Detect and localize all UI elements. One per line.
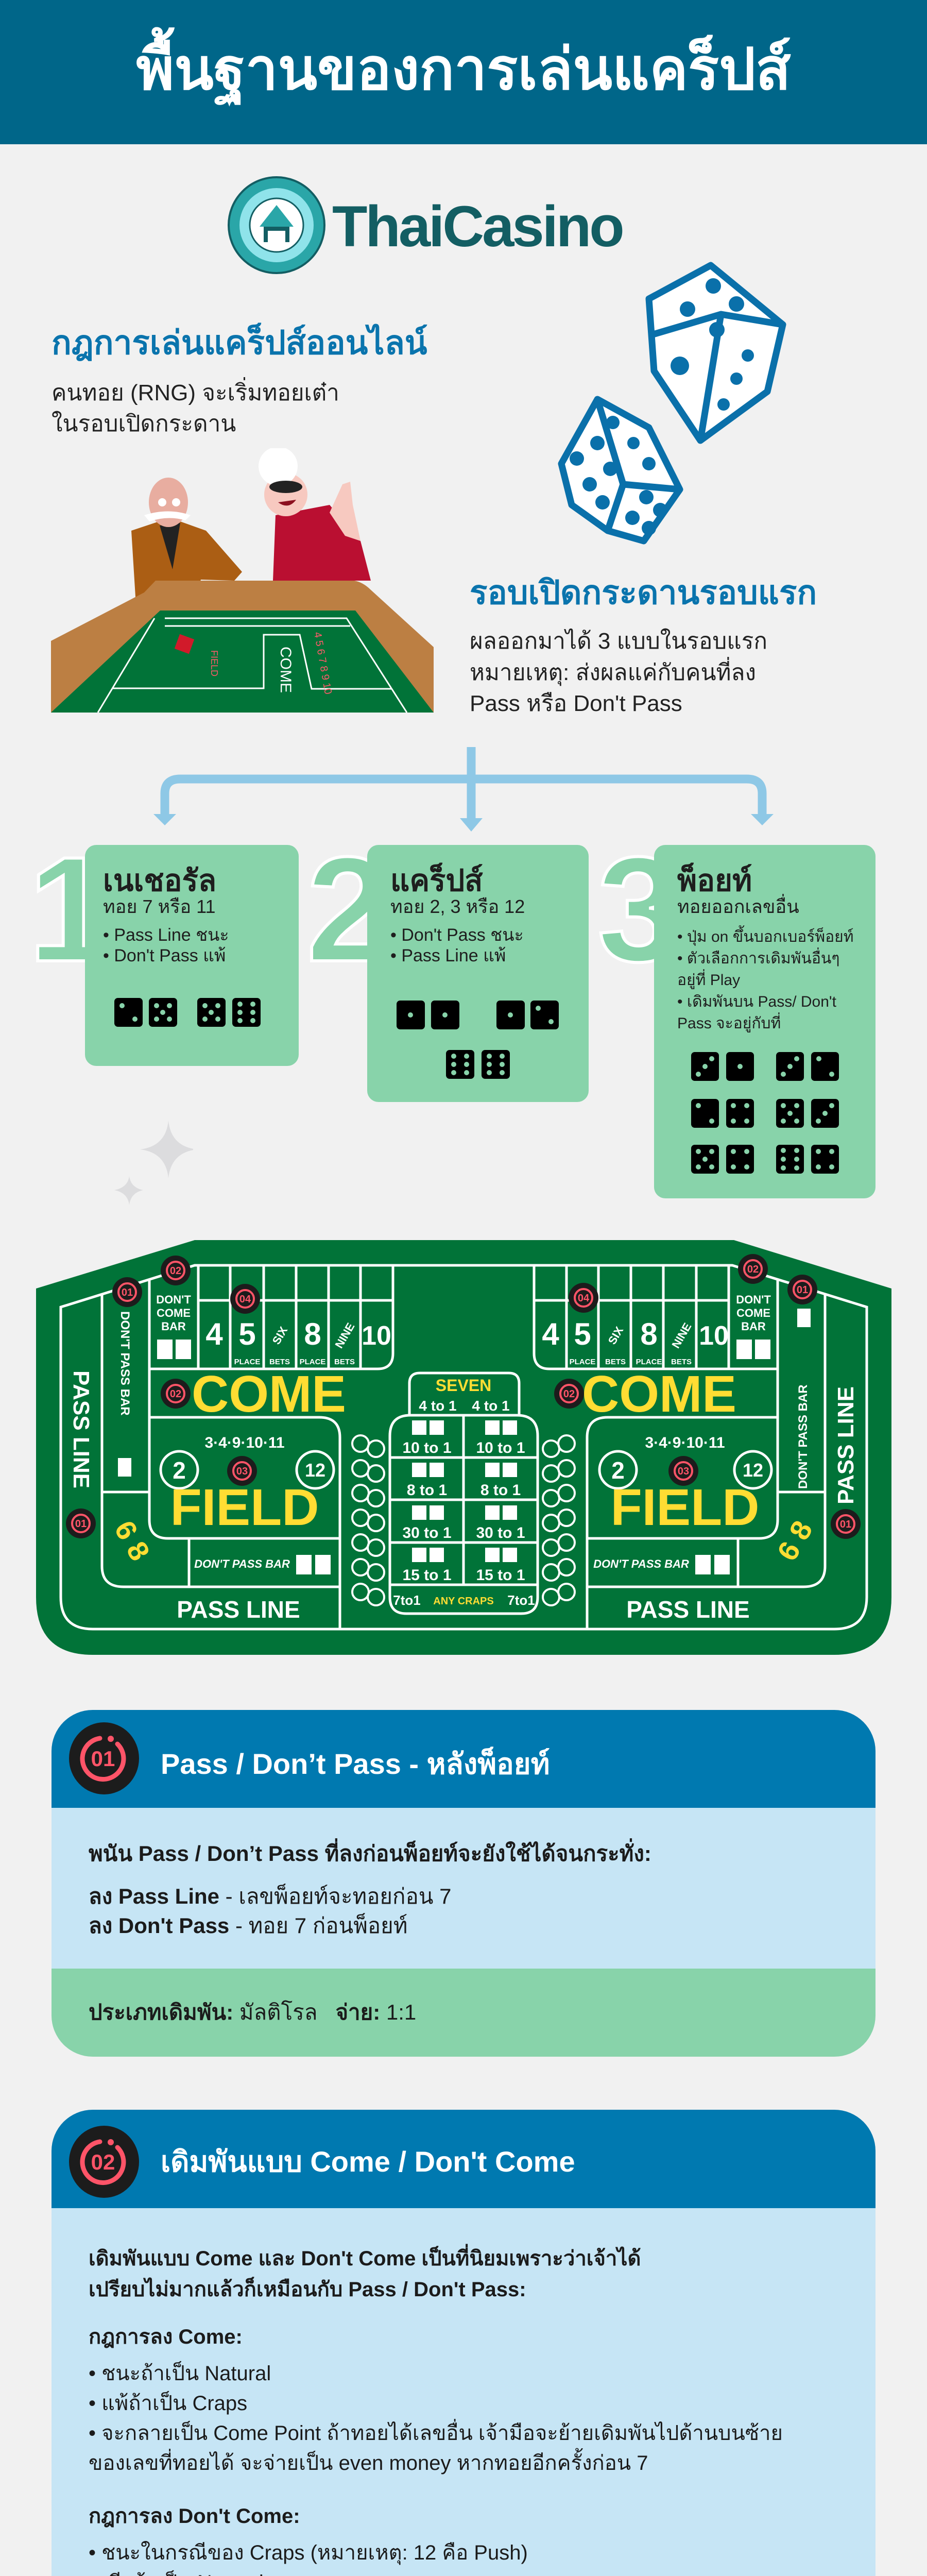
craps table: 10 bbox=[362, 1321, 391, 1351]
craps table: 7to1 bbox=[507, 1592, 535, 1608]
craps table: 6 8 bbox=[108, 1515, 157, 1566]
table badges: 04 bbox=[239, 1294, 251, 1305]
craps table: SIX bbox=[606, 1324, 626, 1347]
logo text: ThaiCasino bbox=[332, 194, 623, 259]
craps table: PASS LINE bbox=[177, 1596, 300, 1623]
craps table: 12 bbox=[743, 1460, 763, 1481]
text block bbox=[52, 1808, 876, 1969]
panel: natural: • Don't Pass แพ้ bbox=[103, 946, 226, 965]
table badges: 02 bbox=[170, 1265, 181, 1277]
text block: • ชนะถ้าเป็น Natural bbox=[89, 2362, 271, 2385]
craps table: PASS LINE bbox=[68, 1370, 94, 1488]
craps table: FIELD bbox=[170, 1479, 319, 1536]
panel: 01 pass / don't pass bbox=[52, 1710, 876, 2057]
panel: point: • ตัวเลือกการเดิมพันอื่นๆ bbox=[677, 950, 840, 967]
text block: กฎการลง Don't Come: bbox=[89, 2505, 300, 2528]
icon: logo chip bbox=[228, 176, 325, 274]
text block: ลง Pass Line - เลขพ็อยท์จะทอยก่อน 7 bbox=[89, 1884, 451, 1908]
table badges: 01 bbox=[840, 1519, 851, 1530]
panel: point bbox=[597, 826, 876, 1198]
heading: แคร็ปส์ bbox=[390, 864, 483, 897]
illustration: players at craps table bbox=[51, 448, 434, 713]
panel: point: • เดิมพันบน Pass/ Don't bbox=[677, 993, 836, 1010]
icon: sparkles bbox=[115, 1121, 193, 1205]
craps table: DON'T PASS BAR bbox=[194, 1557, 290, 1570]
illustration: players at craps table: 4 5 6 7 8 9 10 bbox=[312, 631, 334, 695]
craps table: 8 to 1 bbox=[407, 1482, 447, 1499]
text: rng intro: คนทอย (RNG) จะเริ่มทอยเต๋า bbox=[52, 380, 339, 405]
craps table: PLACE bbox=[636, 1358, 662, 1366]
heading: first round: รอบเปิดกระดานรอบแรก bbox=[470, 574, 817, 611]
craps table: DON'T PASS BAR bbox=[593, 1557, 689, 1570]
text block: เปรียบไม่มากแล้วก็เหมือนกับ Pass / Don't Pass: bbox=[89, 2278, 526, 2301]
craps table: 5 bbox=[238, 1317, 256, 1351]
craps table: 8 to 1 bbox=[480, 1482, 521, 1499]
big number 3: 3 bbox=[597, 826, 680, 993]
craps table: 2 bbox=[611, 1457, 625, 1484]
craps table: ANY CRAPS bbox=[433, 1596, 494, 1607]
table badges: 01 bbox=[75, 1518, 87, 1530]
craps table: DON'T PASS BAR bbox=[796, 1384, 810, 1489]
table badges bbox=[66, 1254, 861, 1539]
craps table: 10 to 1 bbox=[402, 1439, 452, 1456]
craps table: 10 bbox=[699, 1321, 729, 1351]
panel: point: ทอยออกเลขอื่น bbox=[677, 896, 799, 917]
craps table: 10 to 1 bbox=[476, 1439, 525, 1456]
craps table: 8 bbox=[304, 1317, 321, 1351]
craps table: BETS bbox=[671, 1358, 692, 1366]
text block: ของเลขที่ทอยได้ จะจ่ายเป็น even money หากทอยอีกครั้งก่อน 7 bbox=[89, 2452, 648, 2475]
craps table: PLACE bbox=[234, 1358, 260, 1366]
text block: • จะกลายเป็น Come Point ถ้าทอยได้เลขอื่น เจ้ามือจะย้ายเดิมพันไปด้านบนซ้าย bbox=[89, 2422, 783, 2445]
panel: point: อยู่ที่ Play bbox=[677, 972, 740, 989]
craps table: BAR bbox=[161, 1320, 186, 1333]
icon: badge 02: 02 bbox=[91, 2150, 115, 2174]
big number 1: 1 bbox=[28, 826, 111, 993]
heading: online rules: กฎการเล่นแคร็ปส์ออนไลน์ bbox=[52, 324, 427, 361]
table badges: 04 bbox=[578, 1293, 590, 1304]
big number 2: 2 bbox=[306, 826, 389, 993]
panel: natural: ทอย 7 หรือ 11 bbox=[103, 896, 216, 917]
table badges: 02 bbox=[170, 1388, 181, 1400]
heading: Pass / Don’t Pass - หลังพ็อยท์ bbox=[161, 1748, 550, 1780]
craps table: 15 to 1 bbox=[476, 1567, 525, 1584]
craps table: 8 bbox=[640, 1317, 658, 1351]
craps table: 4 to 1 bbox=[472, 1398, 510, 1414]
heading: เนเชอรัล bbox=[103, 864, 216, 897]
craps table: DON'T bbox=[156, 1293, 191, 1306]
craps table: COME bbox=[157, 1307, 191, 1319]
craps table: BETS bbox=[334, 1358, 355, 1366]
panel: craps: ทอย 2, 3 หรือ 12 bbox=[390, 896, 525, 917]
craps table: PLACE bbox=[300, 1358, 325, 1366]
text block: • ชนะในกรณีของ Craps (หมายเหตุ: 12 คือ Push) bbox=[89, 2541, 528, 2564]
text block: เดิมพันแบบ Come และ Don't Come เป็นที่นิยมเพราะว่าเจ้าได้ bbox=[89, 2247, 641, 2270]
craps table: NINE bbox=[332, 1320, 357, 1350]
craps table: SEVEN bbox=[436, 1376, 491, 1395]
craps table: 30 to 1 bbox=[476, 1524, 525, 1541]
panel: 02 come / don't come bbox=[52, 2110, 876, 2576]
craps table: 4 bbox=[205, 1317, 223, 1351]
craps table: NINE bbox=[669, 1320, 694, 1350]
man bbox=[131, 518, 242, 613]
text: first round results: ผลออกมาได้ 3 แบบในรอบแรก bbox=[470, 629, 767, 654]
heading: เดิมพันแบบ Come / Don't Come bbox=[161, 2145, 575, 2178]
craps table: BETS bbox=[605, 1358, 626, 1366]
panel: point: • ปุ่ม on ขึ้นบอกเบอร์พ็อยท์ bbox=[677, 928, 854, 945]
icon: badge 01: 01 bbox=[91, 1747, 115, 1771]
text block bbox=[52, 2208, 876, 2576]
icon: big dice bbox=[558, 262, 786, 544]
panel: craps: • Pass Line แพ้ bbox=[390, 946, 506, 965]
craps table: 30 to 1 bbox=[402, 1524, 452, 1541]
craps table: PLACE bbox=[570, 1358, 595, 1366]
craps table: 2 bbox=[173, 1457, 186, 1484]
craps table: 12 bbox=[305, 1460, 325, 1481]
text: rng intro: ในรอบเปิดกระดาน bbox=[52, 411, 236, 436]
illustration: players at craps table: FIELD bbox=[209, 650, 219, 676]
panel: craps: • Don't Pass ชนะ bbox=[390, 925, 524, 945]
text block: ลง Don't Pass - ทอย 7 ก่อนพ็อยท์ bbox=[89, 1913, 407, 1938]
arrows: branching to 3 outcomes bbox=[153, 747, 774, 832]
craps table: PASS LINE bbox=[833, 1386, 859, 1504]
craps table bbox=[36, 1240, 891, 1655]
header banner bbox=[0, 0, 927, 144]
text: first round results: หมายเหตุ: ส่งผลแค่กับคนที่ลง bbox=[470, 659, 756, 685]
craps table: PASS LINE bbox=[626, 1596, 750, 1623]
dice pairs bbox=[691, 1052, 839, 1174]
table badges: 01 bbox=[797, 1284, 808, 1296]
craps table: COME bbox=[192, 1365, 346, 1423]
text: first round results bbox=[470, 629, 767, 716]
panel: natural bbox=[28, 826, 299, 1066]
text: rng intro bbox=[52, 377, 339, 436]
table badges: 02 bbox=[563, 1388, 575, 1400]
table badges: 02 bbox=[747, 1264, 759, 1275]
table badges: 01 bbox=[122, 1287, 133, 1298]
icon: badge 02 bbox=[69, 2126, 139, 2198]
icon: badge 01 bbox=[69, 1722, 139, 1794]
craps table: SIX bbox=[270, 1324, 290, 1347]
text: first round results: Pass หรือ Don't Pass bbox=[470, 691, 682, 716]
craps table: BAR bbox=[741, 1320, 766, 1333]
craps table: 6 8 bbox=[770, 1515, 819, 1566]
panel: point: Pass จะอยู่กับที่ bbox=[677, 1015, 781, 1032]
craps table: 3·4·9·10·11 bbox=[645, 1434, 725, 1451]
craps table: DON'T PASS BAR bbox=[118, 1311, 132, 1416]
craps table: 4 to 1 bbox=[419, 1398, 457, 1414]
craps table: COME bbox=[582, 1365, 736, 1423]
heading: พ็อยท์ bbox=[677, 864, 752, 897]
title: พื้นฐานของการเล่นแคร็ปส์ bbox=[136, 37, 791, 101]
craps table: BETS bbox=[269, 1358, 290, 1366]
craps table: 5 bbox=[574, 1317, 591, 1351]
text block: พนัน Pass / Don’t Pass ที่ลงก่อนพ็อยท์จะยังใช้ได้จนกระทั่ง: bbox=[89, 1841, 651, 1866]
craps table: 4 bbox=[542, 1317, 559, 1351]
panel: natural: • Pass Line ชนะ bbox=[103, 925, 229, 945]
panel: craps bbox=[306, 826, 589, 1102]
craps table: 15 to 1 bbox=[402, 1567, 452, 1584]
dice pairs bbox=[114, 998, 261, 1027]
table badges: 03 bbox=[236, 1466, 248, 1477]
craps table: 3·4·9·10·11 bbox=[204, 1434, 285, 1451]
table badges: 03 bbox=[678, 1466, 689, 1477]
footer: ประเภทเดิมพัน: มัลติโรล จ่าย: 1:1 bbox=[89, 2000, 416, 2024]
lady bbox=[273, 505, 371, 581]
craps table: 7to1 bbox=[393, 1592, 421, 1608]
text block: • แพ้ถ้าเป็น Craps bbox=[89, 2392, 247, 2415]
dice pairs bbox=[397, 1001, 559, 1079]
craps table: DON'T bbox=[736, 1293, 771, 1306]
logo bbox=[228, 176, 623, 274]
craps table: FIELD bbox=[611, 1479, 759, 1536]
footer bbox=[52, 1969, 876, 2057]
craps table: COME bbox=[736, 1307, 770, 1319]
illustration: players at craps table: COME bbox=[277, 647, 294, 693]
text block: กฎการลง Come: bbox=[89, 2326, 243, 2348]
table bbox=[51, 581, 434, 713]
